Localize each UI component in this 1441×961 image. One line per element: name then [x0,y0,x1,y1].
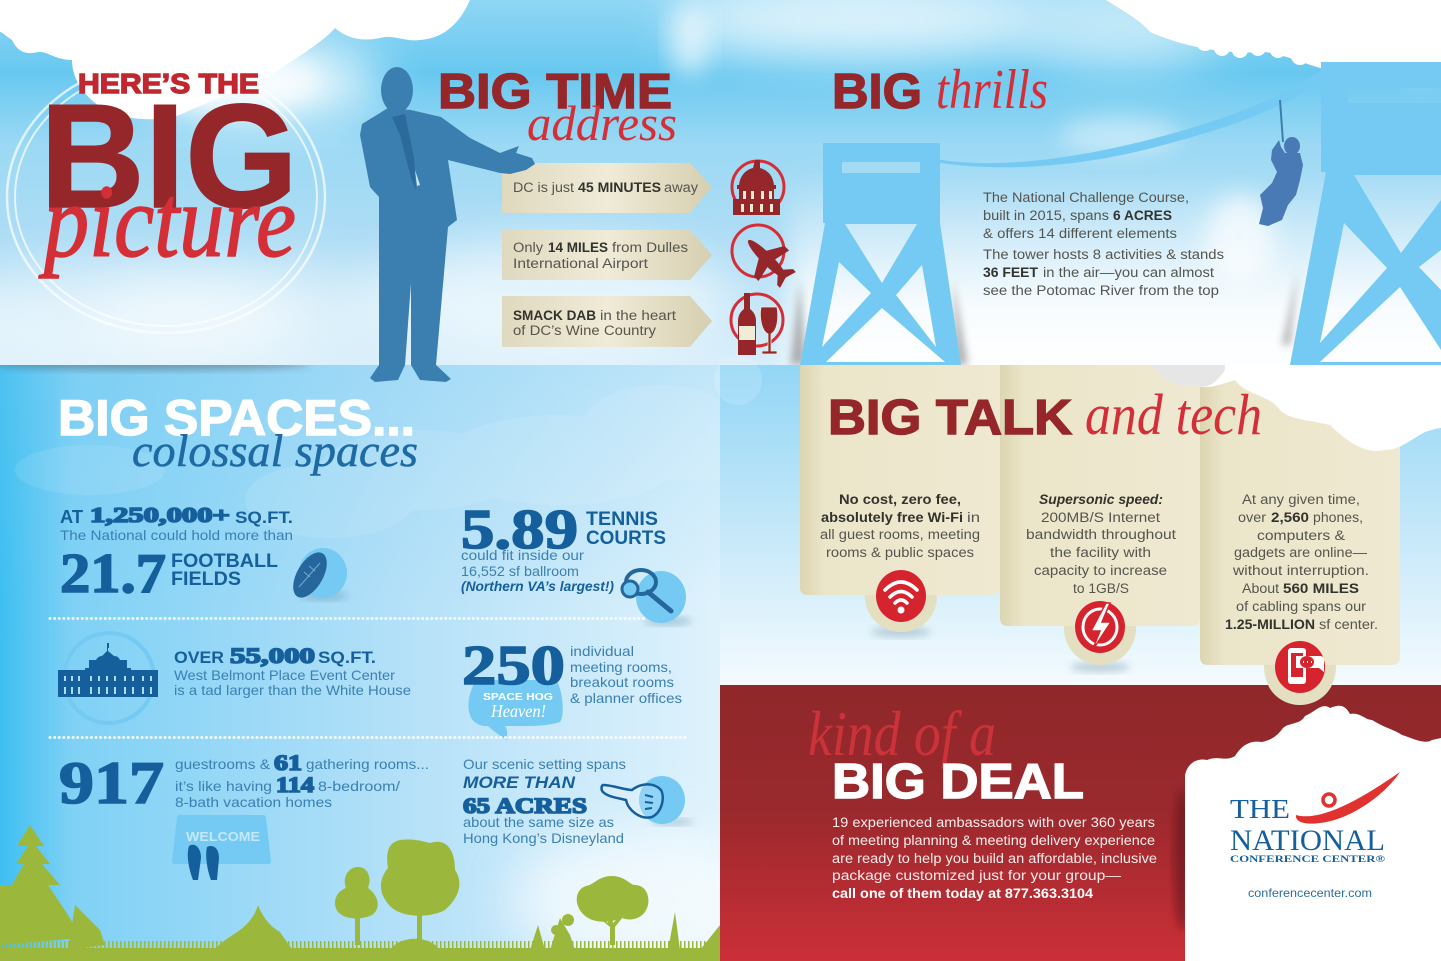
text: supersonic speed: capacity to increase [1034,563,1167,578]
stat: 1,250,000 sq ft and 21.7 football fields: FOOTBALL [171,551,278,572]
icon: welcome mat with flip flops: WELCOME [186,829,260,844]
stat: 917 guestrooms: 61 [274,750,302,775]
stat: 55,000 sq ft: OVER [174,648,224,667]
callout: 45 minutes: DC is just [513,180,574,195]
stat: 917 guestrooms: 8-bath vacation homes [175,794,332,810]
grass band [0,948,720,961]
cloud: top right [1106,0,1441,68]
text: challenge course: in the air—you can almost [1043,265,1214,280]
heading word: big: BIG [40,74,298,239]
text: challenge course: & offers 14 different elements [983,226,1177,241]
top tint of the blue panel [0,365,720,605]
text: free wifi: No cost, zero fee, [839,492,961,507]
callout: 14 miles: 14 MILES [548,240,608,255]
stat: 917 guestrooms: guestrooms & [175,756,271,772]
stat: 917 guestrooms: it’s like having [175,778,272,794]
text: free wifi: absolutely free Wi-Fi [821,510,963,525]
text: connected devices: sf center. [1319,617,1378,632]
callout: 45 minutes: away [664,180,698,195]
callout: smack dab: in the heart [600,308,676,323]
heading: big talk and tech [828,382,1262,447]
round tree, right [577,876,648,945]
icon: welcome mat with flip flops [172,815,271,880]
callout: smack dab: of DC’s Wine Country [513,323,656,338]
panel: big spaces background [0,365,720,961]
heading: big time address: address [527,95,677,151]
text: free wifi: in [967,510,980,525]
text: connected devices: without interruption. [1232,563,1369,578]
text: supersonic speed: the facility with [1050,545,1151,560]
stat: 5.89 tennis courts: 5.89 [461,499,578,561]
panel: big talk background [720,365,1441,685]
text: challenge course: 36 FEET [983,265,1039,280]
stat: 1,250,000 sq ft and 21.7 football fields [60,503,293,605]
landscape: grass and trees [0,825,720,961]
stat: 65 acres: 65 ACRES [463,793,587,818]
logo: the national conference center [1230,772,1400,864]
stat: 5.89 tennis courts: could fit inside our [461,547,584,563]
stat: 5.89 tennis courts: 16,552 sf ballroom [461,563,579,579]
icon: football [286,547,348,603]
text: challenge course [983,190,1224,298]
icon: phone with chat bubble [1275,641,1325,693]
stat: 65 acres: MORE THAN [463,773,576,792]
text: challenge course: The tower hosts 8 activities & stands [983,247,1224,262]
devices icon base overlapping red panel [1268,685,1332,705]
stat: 5.89 tennis courts [461,499,666,594]
text: connected devices: About [1242,581,1279,596]
heading: big spaces: colossal spaces [132,425,418,476]
man silhouette [360,67,535,382]
background: upper sky panel [0,0,1441,365]
text: ambassadors: package customized just for your group— [832,868,1122,883]
stat: 55,000 sq ft [174,643,411,698]
text: challenge course: 6 ACRES [1113,208,1172,223]
text: supersonic speed [1026,492,1176,596]
website link text: conferencecenter.com [1248,886,1372,900]
panel: wifi column [800,365,1000,637]
callout: 45 minutes [502,163,712,213]
stat: 1,250,000 sq ft and 21.7 football fields: FIELDS [171,569,241,590]
icon: wine [731,293,783,355]
grass tips [0,941,720,949]
stat: 5.89 tennis courts: (Northern VA’s largest!) [461,579,615,594]
icon: airplane [732,225,803,295]
icon: tennis racket [622,570,692,625]
faint scalloped clouds [15,385,740,538]
text: supersonic speed: to 1GB/S [1073,581,1129,596]
stat: 55,000 sq ft: 55,000 [230,643,315,668]
text: connected devices: of cabling spans our [1236,599,1367,614]
text: connected devices: At any given time, [1242,492,1360,507]
fern [68,905,105,950]
icon: lightning bolt [1075,601,1125,653]
shadow beside logo panel [1174,790,1190,930]
callout: smack dab: SMACK DAB [513,308,596,323]
stat: 917 guestrooms [59,750,429,816]
text: connected devices: over [1238,510,1267,525]
heading: big time address: BIG TIME [438,65,672,119]
man's feet over the lower panel [370,365,451,382]
stat: 1,250,000 sq ft and 21.7 football fields: 21.7 [60,543,166,605]
panel: kind of a big deal [720,685,1441,961]
callout: 14 miles: from Dulles [612,240,688,255]
right tower [1290,62,1441,365]
heading: big spaces: BIG SPACES... [58,390,415,446]
pine tree [0,825,82,945]
stat: 250 rooms: individual [570,643,634,659]
text: challenge course: built in 2015, spans [983,208,1109,223]
left tower [800,143,961,365]
text: connected devices: 2,560 [1271,510,1309,525]
text: connected devices: gadgets are online— [1234,545,1368,560]
speech bubble: space hog heaven: Heaven! [490,701,546,721]
heading: big thrills: BIG [832,65,922,119]
logo: the national conference center: NATIONAL [1230,824,1385,857]
logo: the national conference center: THE [1230,794,1290,824]
callout: 14 miles [502,230,712,280]
stat: 917 guestrooms: 8-bedroom/ [318,778,400,794]
heading line: here's the: HERE’S THE [78,68,259,99]
text: challenge course: The National Challenge Course, [983,190,1189,205]
stat: 5.89 tennis courts: TENNIS [586,509,658,530]
heading: big spaces [58,390,418,476]
text: free wifi [820,492,980,560]
stat: 917 guestrooms: 917 [59,750,164,816]
stat: 65 acres: Our scenic setting spans [463,756,626,772]
text: ambassadors: of meeting planning & meeting delivery experience [832,833,1155,848]
shadows under top band [0,365,309,374]
stat: 5.89 tennis courts: COURTS [586,528,666,549]
divider [50,736,686,739]
text: connected devices: phones, [1313,510,1363,525]
stat: 65 acres: about the same size as [463,814,614,830]
stat: 65 acres: Hong Kong’s Disneyland [463,830,624,846]
stat: 55,000 sq ft: is a tad larger than the White House [174,682,411,698]
callout: 45 minutes: 45 MINUTES [578,180,661,195]
text: free wifi: all guest rooms, meeting [820,527,980,542]
stat: 917 guestrooms: 114 [276,772,314,797]
tower shadows [790,270,1298,365]
heading word: picture: picture [38,164,296,279]
panel: logo cloud [1185,706,1441,961]
header: Here's the Big Picture [7,61,325,333]
ring behind the heading [7,61,325,333]
heading: kind of a big deal: kind of a [808,698,996,769]
callout: smack dab [502,296,712,347]
round tree, small [335,867,378,945]
heading: kind of a big deal [808,698,1084,809]
icon: white house [58,633,158,723]
stat: 55,000 sq ft: SQ.FT. [318,648,376,667]
text: connected devices: computers & [1257,528,1345,543]
text: connected devices [1225,492,1378,632]
stat: 55,000 sq ft: West Belmont Place Event Center [174,667,395,683]
bush [215,905,292,950]
text: supersonic speed: 200MB/S Internet [1041,510,1160,525]
stat: 1,250,000 sq ft and 21.7 football fields: The National could hold more than [60,527,293,543]
callout: 14 miles: International Airport [513,256,648,271]
heading: big talk and tech: BIG TALK [828,391,1072,445]
stat: 250 rooms: 250 [462,635,565,697]
heading: big thrills: thrills [936,59,1048,121]
cloud: top left [0,0,470,119]
stat: 1,250,000 sq ft and 21.7 football fields: AT [60,507,83,527]
text: ambassadors [832,815,1157,901]
logo: the national conference center: CONFERENCE CENTER® [1230,854,1385,864]
divider [50,617,645,620]
text: supersonic speed: Supersonic speed: [1039,492,1163,507]
right plants [390,912,720,950]
climber on rope [1259,100,1303,226]
text: ambassadors: call one of them today at 877.363.3104 [832,886,1094,901]
white ground haze behind the towers [790,170,1441,410]
icon: pointing hand [602,776,694,825]
text: challenge course: see the Potomac River from the top [983,283,1219,298]
text: connected devices: 560 MILES [1283,581,1359,596]
stat: 250 rooms: & planner offices [570,690,682,706]
heading: big time address [438,65,677,151]
panel: devices column [1200,365,1400,705]
heading: big thrills [832,59,1048,121]
text: ambassadors: are ready to help you build an affordable, inclusive [832,851,1157,866]
stat: 917 guestrooms: gathering rooms... [306,756,429,772]
stat: 250 rooms: meeting rooms, [570,659,672,675]
stat: 250 rooms: breakout rooms [570,674,674,690]
stat: 65 acres [463,756,626,846]
icon: wifi [876,570,926,622]
light glow in lower right of the blue panel [510,830,770,961]
icon: capitol [732,160,784,215]
stat: 1,250,000 sq ft and 21.7 football fields: SQ.FT. [235,508,293,527]
heading: big talk and tech: and tech [1085,382,1262,447]
speech bubble: space hog heaven: SPACE HOG [483,691,553,703]
panel: speed column [1000,365,1200,672]
text: connected devices: 1.25-MILLION [1225,617,1315,632]
stat: 250 rooms [462,635,682,706]
round tree, large [381,839,459,945]
heading: kind of a big deal: BIG DEAL [832,755,1084,809]
speech bubble: space hog heaven [468,680,563,741]
text: supersonic speed: bandwidth throughout [1026,527,1176,542]
cloud: over big talk panel [1153,365,1441,451]
callout: 14 miles: Only [513,240,543,255]
faint cloud on tech panel [714,355,762,405]
zip line [938,70,1322,167]
soft background clouds [0,0,1441,370]
stat: 1,250,000 sq ft and 21.7 football fields: 1,250,000+ [90,503,230,527]
text: free wifi: rooms & public spaces [826,545,974,560]
text: ambassadors: 19 experienced ambassadors with over 360 years [832,815,1155,830]
